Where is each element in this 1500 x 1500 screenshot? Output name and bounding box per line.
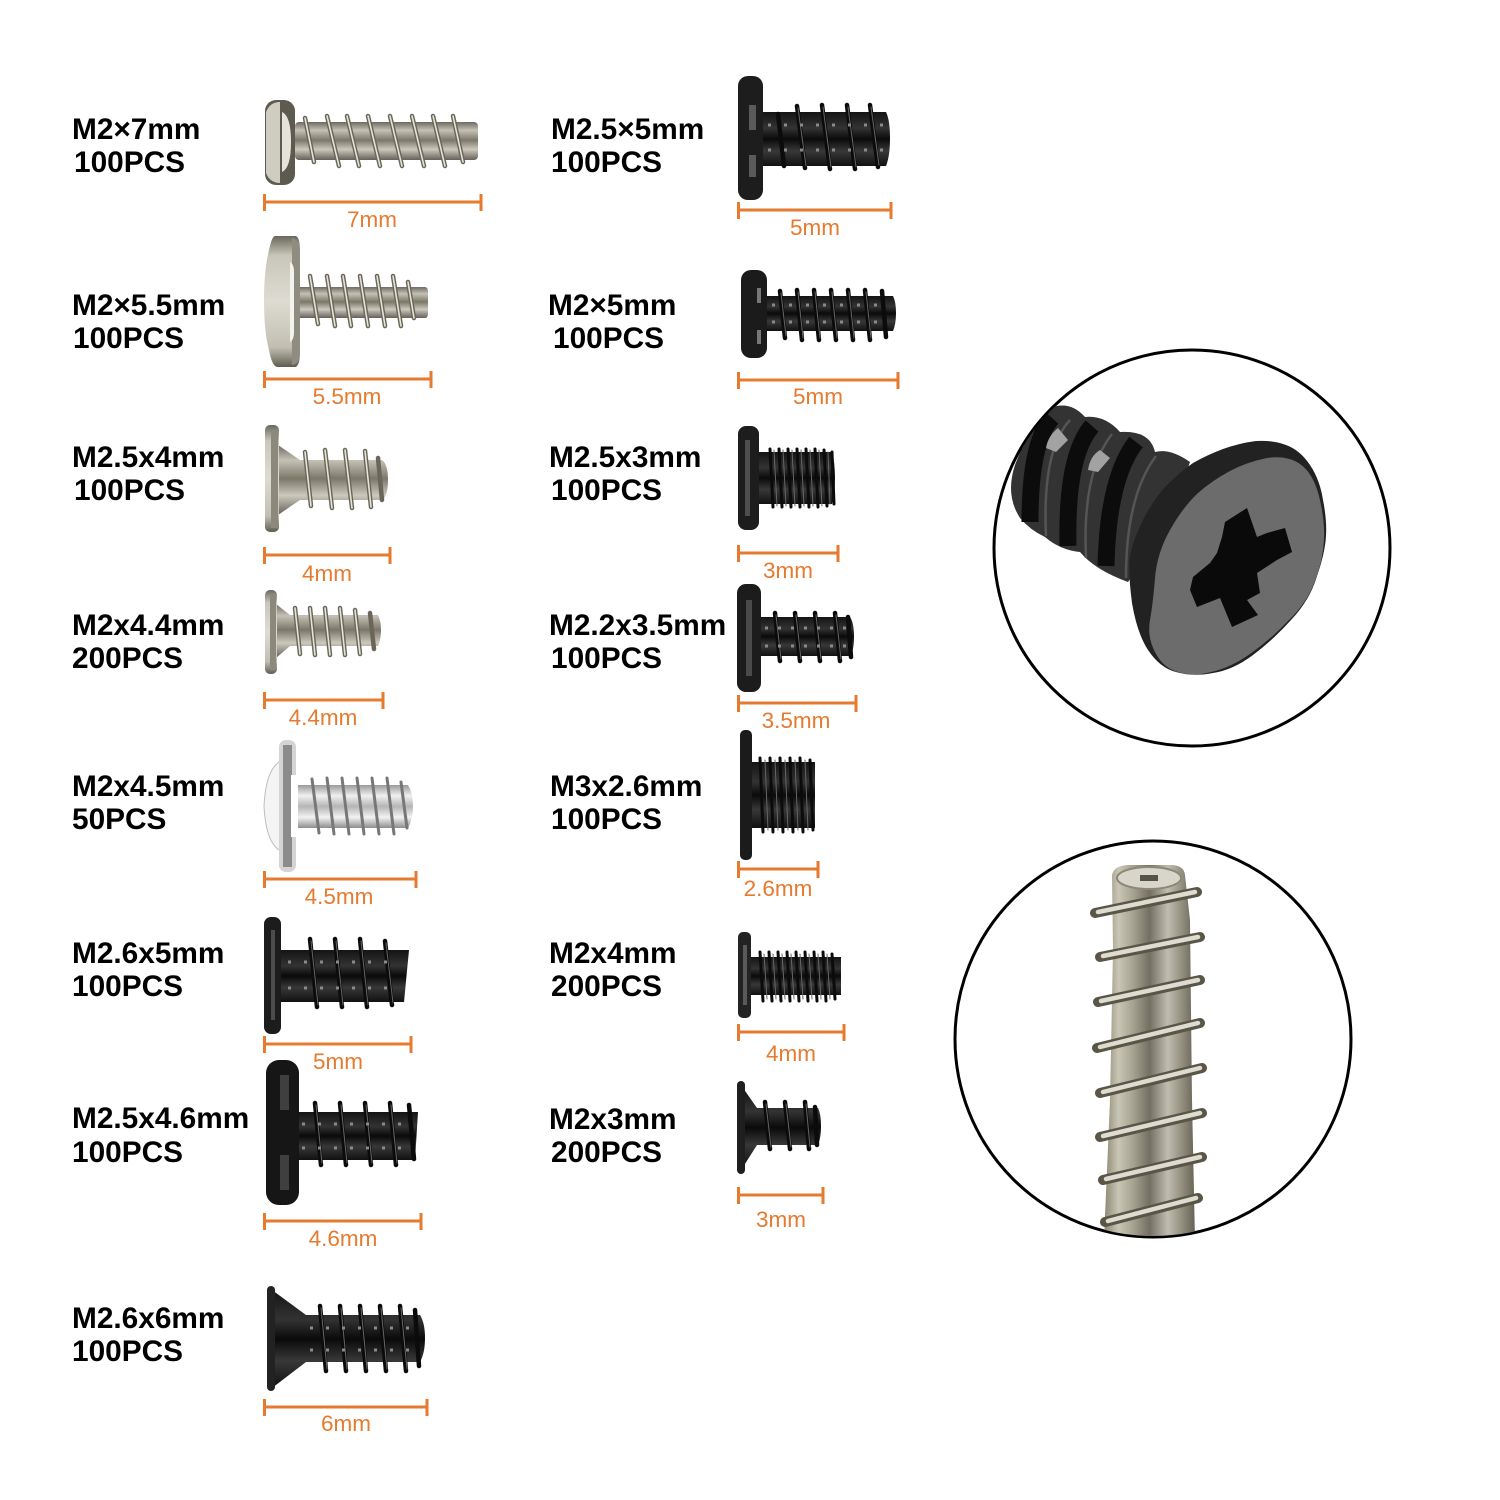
label: M2x4mm 200PCS: 200PCS [551, 970, 662, 1003]
label: M2.6x5mm 100PCS: M2.6x5mm [72, 937, 224, 970]
callout: close-up of black screw head [994, 350, 1390, 746]
icon: black screw 4mm [738, 932, 841, 1018]
label: M2×7mm 100PCS: 100PCS [74, 146, 185, 179]
icon: bright silver screw 4.5mm [264, 740, 413, 872]
dimension: 4.5mm [264, 871, 416, 909]
label: M2.6x6mm 100PCS: M2.6x6mm [72, 1302, 224, 1335]
dimension: 3mm A [738, 545, 838, 583]
label: M2.2x3.5mm 100PCS: 100PCS [551, 642, 662, 675]
dimension: 3mm A: 3mm [763, 558, 813, 583]
label: M2×5.5mm 100PCS: M2×5.5mm [72, 289, 225, 322]
label: M2.5x4.6mm 100PCS: 100PCS [72, 1136, 183, 1169]
dimension: 4.6mm [264, 1213, 421, 1251]
label: M2.5x4mm 100PCS: 100PCS [74, 474, 185, 507]
label: M2x4.4mm 200PCS: 200PCS [72, 642, 183, 675]
label: M3x2.6mm 100PCS [550, 770, 702, 836]
label: M3x2.6mm 100PCS: M3x2.6mm [550, 770, 702, 803]
dimension: 4mm: 4mm [766, 1041, 816, 1066]
icon: silver screw 4mm [265, 425, 388, 532]
dimension: 6mm: 6mm [321, 1411, 371, 1436]
label: M2x4.4mm 200PCS [72, 609, 224, 675]
callout: close-up of silver screw thread [955, 841, 1351, 1240]
dimension: 5.5mm: 5.5mm [313, 384, 381, 409]
dimension: 7mm [264, 194, 481, 232]
icon: black countersunk screw 6mm [267, 1286, 425, 1391]
label: M2.6x5mm 100PCS: 100PCS [72, 970, 183, 1003]
dimension: 5mm A: 5mm [790, 215, 840, 240]
dimension: 5.5mm [264, 371, 431, 409]
dimension: 5mm A [738, 202, 891, 240]
label: M2x4.4mm 200PCS: M2x4.4mm [72, 609, 224, 642]
label: M2x4mm 200PCS: M2x4mm [549, 937, 677, 970]
label: M2×5mm 100PCS: M2×5mm [548, 289, 676, 322]
icon: silver screw 5.5mm [264, 236, 428, 367]
label: M2×5.5mm 100PCS [72, 289, 225, 355]
label: M2.5x4.6mm 100PCS: M2.5x4.6mm [72, 1102, 249, 1135]
label: M2x4mm 200PCS [549, 937, 677, 1003]
label: M2.5x4.6mm 100PCS [72, 1102, 249, 1169]
icon: black screw 2.6mm [740, 730, 815, 860]
label: M2.6x6mm 100PCS: 100PCS [72, 1335, 183, 1368]
dimension: 4mm [264, 547, 390, 586]
label: M2x3mm 200PCS: M2x3mm [549, 1103, 677, 1136]
label: M2×7mm 100PCS [72, 113, 200, 179]
icon: black screw 5mm B [741, 270, 896, 358]
label: M2x4.5mm 50PCS: M2x4.5mm [72, 770, 224, 803]
label: M2×5mm 100PCS: 100PCS [553, 322, 664, 355]
dimension: 4.5mm: 4.5mm [305, 884, 373, 909]
label: M2.5x3mm 100PCS: M2.5x3mm [549, 441, 701, 474]
label: M2.5×5mm 100PCS: M2.5×5mm [551, 113, 704, 146]
label: M2.5x4mm 100PCS [72, 441, 224, 507]
dimension: 2.6mm [738, 861, 818, 901]
dimension: 5mm: 5mm [313, 1049, 363, 1074]
icon: silver screw 4.4mm [265, 590, 381, 674]
label: M2×5mm 100PCS [548, 289, 676, 355]
dimension: 5mm [264, 1036, 411, 1074]
label: M2.6x6mm 100PCS [72, 1302, 224, 1368]
label: M2.5x4mm 100PCS: M2.5x4mm [72, 441, 224, 474]
label: M2.2x3.5mm 100PCS: M2.2x3.5mm [549, 609, 726, 642]
dimension: 3.5mm [738, 695, 856, 733]
dimension: 4mm [738, 1024, 844, 1066]
label: M2.5x3mm 100PCS: 100PCS [551, 474, 662, 507]
label: M2×7mm 100PCS: M2×7mm [72, 113, 200, 146]
dimension: 7mm: 7mm [347, 207, 397, 232]
dimension: 2.6mm: 2.6mm [744, 876, 812, 901]
icon: black screw 4.6mm [266, 1060, 418, 1205]
icon: silver screw 7mm [265, 100, 478, 185]
label: M2x4.5mm 50PCS: 50PCS [72, 803, 166, 836]
dimension: 5mm B [738, 372, 898, 409]
dimension: 4.4mm [264, 692, 383, 730]
label: M2.5×5mm 100PCS [551, 113, 704, 179]
label: M2x3mm 200PCS: 200PCS [551, 1136, 662, 1169]
dimension: 5mm B: 5mm [793, 384, 843, 409]
label: M2.6x5mm 100PCS [72, 937, 224, 1003]
dimension: 3mm B [738, 1187, 823, 1232]
label: M2.5×5mm 100PCS: 100PCS [551, 146, 662, 179]
icon: black screw 5mm [264, 917, 409, 1034]
icon: black screw 3.5mm [737, 584, 854, 692]
dimension: 3mm B: 3mm [756, 1207, 806, 1232]
label: M2×5.5mm 100PCS: 100PCS [73, 322, 184, 355]
label: M3x2.6mm 100PCS: 100PCS [551, 803, 662, 836]
label: M2.5x3mm 100PCS [549, 441, 701, 507]
icon: black screw 5mm A [738, 76, 890, 200]
label: M2x3mm 200PCS [549, 1103, 677, 1169]
label: M2.2x3.5mm 100PCS [549, 609, 726, 675]
label: M2x4.5mm 50PCS [72, 770, 224, 836]
dimension: 4.4mm: 4.4mm [289, 705, 357, 730]
panel: middle column of screws [548, 76, 898, 1232]
dimension: 4mm: 4mm [302, 561, 352, 586]
panel: left column of screws [72, 100, 481, 1436]
dimension: 6mm [264, 1399, 427, 1436]
dimension: 4.6mm: 4.6mm [309, 1226, 377, 1251]
icon: black screw 3mm A [738, 426, 835, 530]
dimension: 3.5mm: 3.5mm [762, 708, 830, 733]
icon: black countersunk screw 3mm [737, 1081, 821, 1174]
